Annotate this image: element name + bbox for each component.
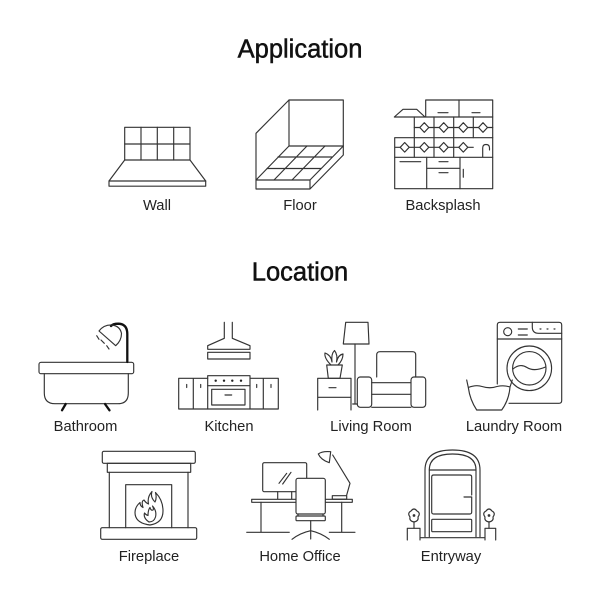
icon: kitchen xyxy=(179,322,278,409)
label: Backsplash: Backsplash xyxy=(405,198,481,214)
title: Application: Application xyxy=(238,36,362,64)
label: Bathroom: Bathroom xyxy=(54,419,117,435)
icon: wall xyxy=(109,127,206,186)
label: Fireplace: Fireplace xyxy=(119,549,179,565)
label: Living Room: Living Room xyxy=(330,419,412,435)
title: Location: Location xyxy=(252,258,348,286)
icon: home office xyxy=(247,452,355,539)
icon: fireplace xyxy=(101,451,197,539)
icon: living room xyxy=(318,322,426,410)
icon: backsplash xyxy=(394,100,493,189)
label: Wall: Wall xyxy=(143,198,171,214)
icon: laundry room xyxy=(467,322,562,410)
icon: floor xyxy=(256,100,343,189)
label: Home Office: Home Office xyxy=(259,549,341,565)
icon: bathroom xyxy=(39,324,134,410)
label: Entryway: Entryway xyxy=(421,549,482,565)
label: Laundry Room: Laundry Room xyxy=(466,419,562,435)
icon: entryway xyxy=(407,450,496,540)
label: Kitchen: Kitchen xyxy=(204,419,254,435)
label: Floor: Floor xyxy=(283,198,317,214)
